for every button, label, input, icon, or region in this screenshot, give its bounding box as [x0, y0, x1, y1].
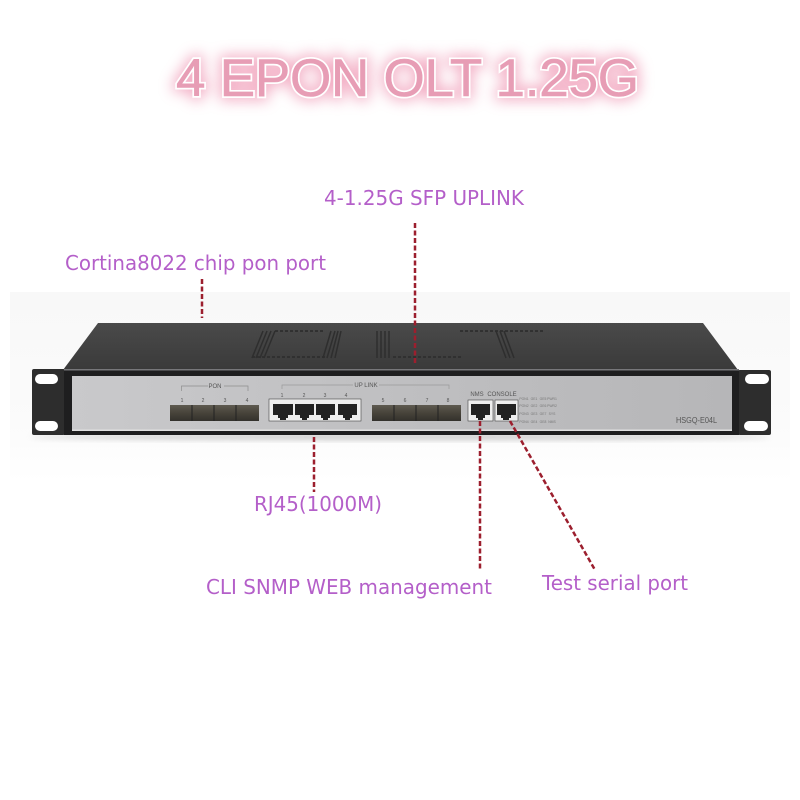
front frame — [64, 369, 739, 435]
silver front panel — [72, 376, 732, 431]
device top cover — [63, 323, 738, 370]
status LED labels: PON3 — [519, 412, 529, 416]
status LED labels — [519, 397, 557, 424]
status LED labels: GE4 — [531, 420, 538, 424]
RJ45 ports — [269, 393, 361, 421]
status LED labels: SYS — [549, 412, 556, 416]
label: management: CLI SNMP WEB management — [206, 575, 492, 599]
console port: CONSOLE — [487, 392, 517, 398]
status LED labels: NMS — [548, 420, 556, 424]
NMS port: NMS — [470, 392, 484, 398]
model name: HSGQ-E04L — [676, 416, 718, 425]
status LED labels: GE3 — [531, 412, 538, 416]
uplink heading — [282, 383, 449, 389]
PON section: 2 — [202, 398, 205, 404]
PON section — [170, 384, 259, 421]
RJ45 ports: 1 — [281, 393, 284, 399]
RJ45 ports: 4 — [345, 393, 348, 399]
label: RJ45: RJ45(1000M) — [254, 492, 382, 516]
status LED labels: GE8 — [540, 420, 547, 424]
top vents — [252, 331, 543, 358]
uplink heading: UP LINK — [354, 383, 378, 389]
device: OLT rack unit — [30, 323, 771, 440]
NMS port — [468, 392, 493, 421]
PON section: 3 — [224, 398, 227, 404]
status LED labels: GE2 — [531, 404, 538, 408]
status LED labels: GE5 — [540, 397, 547, 401]
label: Cortina chip: Cortina8022 chip pon port — [65, 251, 326, 275]
right rack ear — [738, 370, 771, 435]
console port — [487, 392, 518, 421]
SFP uplink ports — [372, 398, 461, 421]
status LED labels: PON4 — [519, 420, 529, 424]
label: serial port: Test serial port — [541, 571, 688, 595]
SFP uplink ports: 8 — [447, 398, 450, 404]
PON section: 4 — [246, 398, 249, 404]
left rack ear — [32, 369, 65, 435]
status LED labels: PON2 — [519, 404, 529, 408]
RJ45 ports: 3 — [324, 393, 327, 399]
RJ45 ports: 2 — [303, 393, 306, 399]
SFP uplink ports: 7 — [426, 398, 429, 404]
title: 4 EPON OLT 1.25G — [176, 49, 639, 108]
arrow: SFP uplink leader — [414, 223, 416, 364]
title: 4 EPON OLT 1.25G — [176, 49, 639, 108]
status LED labels: GE7 — [540, 412, 547, 416]
title: 4 EPON OLT 1.25G — [176, 49, 639, 108]
arrow: RJ45 leader — [313, 437, 315, 492]
arrow: serial port leader — [510, 421, 595, 570]
status LED labels: PWR1 — [547, 397, 557, 401]
PON section: 1 — [181, 398, 184, 404]
status LED labels: GE6 — [540, 404, 547, 408]
status LED labels: PON1 — [519, 397, 529, 401]
SFP uplink ports: 6 — [404, 398, 407, 404]
PON section: PON — [208, 384, 222, 390]
status LED labels: GE1 — [531, 397, 538, 401]
arrow: Cortina chip leader — [201, 279, 203, 318]
arrow: management leader — [479, 421, 481, 570]
status LED labels: PWR2 — [547, 404, 557, 408]
label: SFP uplink: 4-1.25G SFP UPLINK — [324, 186, 525, 210]
SFP uplink ports: 5 — [382, 398, 385, 404]
